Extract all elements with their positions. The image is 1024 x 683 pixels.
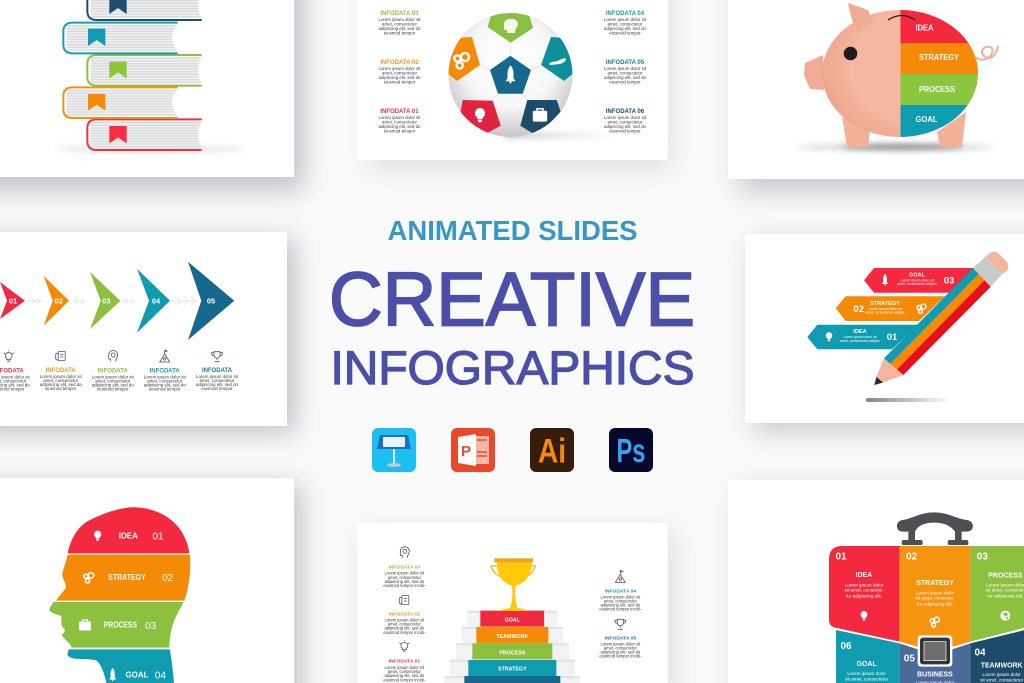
ribbon: strategy: amet, consectetur adipisc	[865, 310, 905, 314]
suitcase: teamwork: 04	[974, 648, 986, 659]
suitcase: goal: GOAL	[857, 661, 877, 668]
arrows	[0, 262, 234, 340]
suitcase: teamwork: TEAMWORK	[981, 662, 1023, 669]
text: infodata 03	[379, 11, 421, 36]
suitcase: idea	[829, 546, 900, 642]
suitcase: process: sit amet, consecte-	[986, 588, 1024, 593]
suitcase: teamwork: sit amet, consectetur	[980, 677, 1024, 682]
suitcase: idea: Lorem ipsum dolor	[845, 582, 884, 587]
left text: infodata 03: adipiscing elit, sed do	[384, 579, 425, 584]
text: infodata 02: Lorem ipsum dolor sit	[379, 66, 421, 71]
suitcase: process: Lorem ipsum dolor	[986, 582, 1024, 587]
left icon: head	[400, 547, 409, 558]
ribbon: strategy	[836, 296, 945, 321]
ribbon: goal: amet, consectetur adipisc	[897, 282, 937, 286]
head: idea segment	[68, 507, 189, 553]
panel: trophy stairs infographic	[357, 523, 668, 683]
left text: infodata 02: amet, consectetur	[388, 622, 421, 627]
text: infodata 04: INFODATA 04	[606, 11, 645, 17]
icon: illustrator	[530, 428, 574, 472]
head: process segment: PROCESS	[104, 621, 138, 630]
timeline text: 05: INFODATA	[202, 368, 233, 374]
pig ear	[848, 3, 873, 32]
head shape	[49, 507, 190, 683]
pig stripes	[900, 8, 980, 139]
panel: arrow timeline	[0, 232, 287, 426]
icon: powerpoint	[451, 428, 495, 472]
pig tail	[975, 46, 998, 60]
timeline text: 02: amet, consectetur	[43, 378, 79, 383]
text: infodata 06: adipiscing elit, sed do	[604, 124, 647, 129]
text: infodata 05: Lorem ipsum dolor sit	[604, 66, 647, 71]
timeline text: 03: eiusmod tempor	[97, 386, 129, 391]
head: goal segment	[67, 649, 174, 683]
suitcase: goal: sit amet, consectetur	[845, 676, 889, 681]
text: infodata 01: eiusmod tempor	[384, 128, 416, 134]
ribbon: goal: GOAL	[909, 272, 926, 278]
ribbon: idea: Lorem ipsum dolor sit	[843, 335, 877, 339]
left text: infodata 02: eiusmod tempor incidi-	[383, 630, 426, 635]
left text: infodata 01: adipiscing elit, sed do	[384, 673, 425, 678]
timeline text: 05: adipiscing elit, sed do	[196, 382, 239, 387]
head: idea segment: 01	[152, 531, 164, 542]
right text: infodata 05: eiusmod tempor incidi-	[599, 653, 642, 658]
suitcase: idea: tur adipiscing elit,	[846, 593, 882, 598]
text: infodata 01: amet, consectetur	[382, 120, 417, 124]
right text: infodata 04: adipiscing elit, sed do	[600, 603, 641, 608]
head: process segment: 03	[145, 621, 157, 632]
suitcase: idea: IDEA	[856, 572, 872, 579]
suitcase: idea: sit amet, consecte-	[844, 588, 884, 593]
left text: infodata 02: INFODATA 02	[388, 612, 420, 618]
head: strategy segment: 02	[162, 573, 174, 584]
timeline text: 04: eiusmod tempor	[149, 386, 181, 391]
text: infodata 05: INFODATA 05	[606, 60, 645, 66]
text: infodata 02: eiusmod tempor	[384, 80, 416, 84]
text: infodata 03: INFODATA 03	[380, 11, 419, 17]
right text: infodata 04: Lorem ipsum dolor sit	[600, 595, 641, 600]
head: goal segment: 04	[155, 671, 166, 682]
arrow numbers: 04	[152, 296, 161, 306]
arrow numbers	[9, 296, 215, 306]
pig labels: IDEA	[916, 22, 934, 32]
timeline text: 04: adipiscing elit, sed do	[144, 382, 186, 387]
ball icons	[454, 19, 566, 122]
right text: infodata 04: amet, consectetur	[604, 599, 637, 604]
timeline text: 01	[0, 368, 30, 391]
panel: head infographic	[0, 478, 294, 683]
timeline text: 03: INFODATA	[98, 368, 128, 374]
head: strategy segment	[56, 555, 190, 601]
right text: infodata 05: Lorem ipsum dolor sit	[600, 641, 641, 646]
suitcase: process: PROCESS	[988, 572, 1023, 579]
text: infodata 05	[604, 60, 647, 84]
text: infodata 02: adipiscing elit, sed do	[379, 75, 421, 80]
pencil shadow	[866, 398, 951, 402]
pig body	[822, 10, 978, 137]
head: process segment	[49, 602, 183, 648]
ribbon: idea: amet, consectetur adipisc	[840, 339, 880, 343]
text: infodata 04: amet, consectetur	[608, 22, 643, 26]
text: infodata 06	[604, 109, 647, 134]
arrow numbers: 02	[55, 296, 63, 306]
timeline text: 03: amet, consectetur	[95, 378, 131, 383]
text: infodata 01: adipiscing elit, sed do	[379, 124, 421, 129]
text: infodata 05: amet, consectetur	[608, 70, 643, 76]
arrow numbers: 03	[102, 296, 110, 306]
left text: infodata 01: eiusmod tempor incidi-	[383, 677, 426, 682]
ball seams	[480, 43, 541, 100]
timeline text: 03: adipiscing elit, sed do	[92, 382, 134, 387]
ribbon: strategy: Lorem ipsum dolor sit	[868, 307, 902, 311]
timeline text: 05: Lorem ipsum dolor sit	[196, 374, 239, 379]
left text: infodata 02	[383, 612, 426, 635]
text: infodata 02: INFODATA 02	[380, 60, 419, 66]
text: infodata 06: INFODATA 06	[606, 109, 645, 115]
book: green	[87, 55, 202, 86]
text: infodata 01: Lorem ipsum dolor sit	[379, 115, 421, 120]
right text: infodata 05: INFODATA 05	[604, 635, 636, 641]
suitcase: strategy	[900, 546, 970, 652]
timeline text: 05: amet, consectetur	[200, 378, 235, 383]
left text: infodata 03: Lorem ipsum dolor sit	[384, 571, 425, 576]
stair: strategy	[468, 660, 556, 676]
pig eye	[844, 47, 857, 60]
timeline text: 05	[196, 368, 239, 391]
timeline text: 02: eiusmod tempor	[45, 386, 77, 391]
right icon: cup	[615, 619, 626, 629]
timeline text: 02: adipiscing elit, sed do	[40, 382, 82, 387]
panel: soccer ball infographic	[357, 0, 668, 160]
pig labels: PROCESS	[919, 84, 955, 94]
right icon: cone	[615, 570, 625, 582]
text: infodata 04: eiusmod tempor	[609, 30, 641, 36]
stair: process	[472, 643, 552, 659]
timeline text: 04	[144, 368, 186, 391]
pig labels: GOAL	[916, 114, 938, 124]
head: strategy segment: STRATEGY	[108, 573, 146, 582]
suitcase: idea: 01	[835, 552, 847, 563]
text: infodata 04: Lorem ipsum dolor sit	[604, 17, 647, 22]
icon: powerpoint: P	[461, 443, 471, 460]
pig legs	[842, 112, 966, 147]
text: infodata 03: eiusmod tempor	[384, 30, 416, 36]
left text: infodata 02: adipiscing elit, sed do	[384, 626, 425, 631]
ribbon: strategy: 02	[853, 304, 864, 315]
pig labels: STRATEGY	[919, 52, 959, 62]
suitcase: strategy: sit amet, consecte-	[915, 596, 955, 601]
timeline text: 02: INFODATA	[46, 368, 76, 374]
right text: infodata 05: amet, consectetur	[604, 645, 637, 650]
pig shadow	[795, 143, 995, 151]
timeline text: 02	[40, 368, 82, 391]
timeline text: 03	[92, 368, 134, 391]
text: infodata 04: adipiscing elit, sed do	[604, 26, 647, 31]
suitcase: process: tur adipiscing elit,	[987, 593, 1023, 598]
timeline text: 03: Lorem ipsum dolor sit	[92, 374, 134, 380]
icon: illustrator: Ai	[538, 432, 566, 470]
text: infodata 02	[379, 60, 421, 84]
ribbon: goal: Lorem ipsum dolor sit	[900, 278, 934, 282]
left icon: note	[399, 595, 409, 604]
title: creative: CREATIVE	[329, 258, 695, 342]
suitcase handle	[897, 512, 973, 545]
stair: process: PROCESS	[499, 650, 526, 656]
suitcase: business: BUSINESS	[917, 671, 953, 678]
panel: suitcase infographic	[728, 480, 1024, 683]
text: infodata 05: adipiscing elit, sed do	[604, 75, 647, 80]
text: infodata 02: amet, consectetur	[382, 70, 417, 76]
left text: infodata 03: INFODATA 03	[388, 565, 420, 571]
book: teal	[63, 23, 178, 53]
stair: strategy: STRATEGY	[498, 667, 527, 673]
suitcase: process	[970, 546, 1024, 642]
left text: infodata 01: INFODATA 01	[388, 659, 420, 665]
pig labels	[916, 22, 959, 124]
suitcase: goal	[836, 630, 900, 683]
text: infodata 04	[604, 11, 647, 36]
ribbon: strategy: STRATEGY	[870, 301, 900, 307]
text: infodata 06: eiusmod tempor	[609, 128, 641, 134]
head: goal segment: GOAL	[125, 671, 149, 680]
title: infographics: INFOGRAPHICS	[330, 341, 694, 394]
left icon: bulb	[399, 640, 409, 651]
left text: infodata 01	[383, 659, 426, 682]
panel: stack of books	[0, 0, 294, 177]
arrow numbers: 01	[9, 296, 17, 306]
stair: teamwork	[476, 627, 548, 643]
timeline text: 05: eiusmod tempor	[201, 386, 233, 391]
ribbon: idea: 01	[887, 332, 898, 343]
text: infodata 01	[379, 109, 421, 134]
suitcase: strategy: STRATEGY	[916, 580, 954, 587]
grey stairs	[444, 611, 580, 683]
suitcase: strategy: 02	[906, 552, 918, 563]
text: infodata 03: Lorem ipsum dolor sit	[379, 17, 421, 22]
ribbon: goal: 03	[944, 276, 954, 286]
book: red	[87, 119, 202, 150]
suitcase: teamwork: Lorem ipsum dolor	[982, 672, 1021, 677]
stair: base	[464, 676, 560, 683]
book: orange	[63, 87, 178, 118]
ball shadow	[505, 133, 615, 138]
text: infodata 03: adipiscing elit, sed do	[379, 26, 421, 31]
ribbon: goal	[864, 268, 975, 293]
text: infodata 03: amet, consectetur	[382, 22, 417, 26]
icon: keynote	[372, 428, 416, 472]
stair: goal	[480, 611, 544, 627]
suitcase lock	[918, 635, 952, 667]
book shadow	[55, 146, 245, 152]
right text: infodata 04	[599, 588, 642, 612]
stair: goal: GOAL	[505, 618, 521, 624]
ball pentagons	[446, 11, 575, 133]
right text: infodata 05	[599, 635, 642, 658]
text: infodata 06: amet, consectetur	[608, 120, 643, 124]
left text: infodata 03: amet, consectetur	[388, 575, 421, 580]
book: navy	[87, 0, 202, 20]
trophy	[491, 558, 535, 611]
ribbon: idea	[807, 325, 918, 349]
text: infodata 06: Lorem ipsum dolor sit	[604, 115, 647, 120]
icon: photoshop: Ps	[616, 432, 646, 469]
left text: infodata 03: eiusmod tempor incidi-	[383, 583, 426, 588]
panel: piggy bank	[728, 0, 1024, 179]
suitcase: goal: 06	[840, 641, 852, 652]
timeline icons	[4, 350, 223, 362]
icon: photoshop	[609, 428, 653, 472]
pig snout	[804, 55, 824, 90]
right text: infodata 04: eiusmod tempor incidi-	[599, 607, 642, 612]
subtitle: animated slides: ANIMATED SLIDES	[388, 215, 638, 246]
text: infodata 05: eiusmod tempor	[609, 80, 641, 84]
suitcase: strategy: Lorem ipsum dolor	[916, 590, 955, 595]
suitcase: process: 03	[977, 552, 988, 563]
timeline text: 04: Lorem ipsum dolor sit	[144, 374, 186, 380]
pencil	[874, 252, 1008, 385]
timeline text: 04: amet, consectetur	[147, 378, 183, 383]
stair: teamwork: TEAMWORK	[496, 634, 528, 640]
left text: infodata 03	[383, 565, 426, 588]
connector chevrons	[27, 297, 198, 305]
head: idea segment: IDEA	[119, 531, 138, 540]
right text: infodata 05: adipiscing elit, sed do	[600, 649, 641, 654]
pig coin slot	[888, 16, 915, 20]
suitcase: business	[900, 643, 970, 683]
ribbon: idea: IDEA	[853, 329, 867, 335]
suitcase: business: 05	[904, 653, 915, 664]
left text: infodata 01: Lorem ipsum dolor sit	[384, 665, 425, 670]
left text: infodata 02: Lorem ipsum dolor sit	[384, 618, 425, 623]
suitcase: goal: Lorem ipsum dolor	[847, 671, 886, 676]
arrow numbers: 05	[207, 296, 215, 306]
timeline text: 02: Lorem ipsum dolor sit	[40, 374, 82, 379]
panel: pencil infographic	[745, 234, 1024, 423]
suitcase: teamwork	[970, 630, 1024, 683]
right text: infodata 04: INFODATA 04	[604, 588, 636, 594]
text: infodata 01: INFODATA 01	[380, 109, 419, 115]
soccer ball	[448, 13, 572, 137]
books	[63, 0, 202, 150]
left text: infodata 01: amet, consectetur	[388, 669, 421, 674]
suitcase: strategy: tur adipiscing elit,	[917, 601, 953, 606]
timeline text: 04: INFODATA	[150, 368, 180, 374]
